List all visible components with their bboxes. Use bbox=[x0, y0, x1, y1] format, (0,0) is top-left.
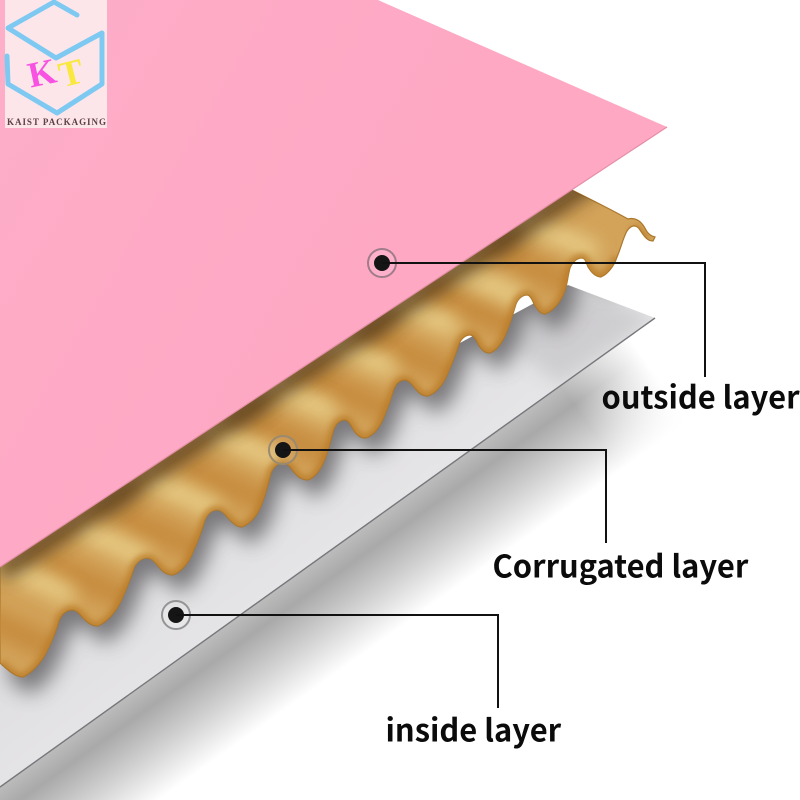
callout: outside layer bbox=[368, 249, 800, 418]
panel: inside layer sheet bbox=[0, 285, 656, 788]
leader line: outside layer bbox=[382, 263, 705, 377]
label: outside layer: outside layer bbox=[602, 372, 800, 418]
marker: inside layer bbox=[162, 601, 190, 629]
label: corrugated layer: Corrugated layer bbox=[492, 542, 749, 586]
panel: outside layer pink sheet bbox=[0, 0, 667, 567]
panel: corrugated layer bbox=[0, 190, 656, 678]
shadow cast below the inside layer bbox=[0, 318, 800, 800]
callout: inside layer bbox=[162, 601, 562, 750]
icon: logo cube bbox=[7, 2, 102, 113]
marker: outside layer bbox=[368, 249, 396, 277]
logo letter K: K bbox=[24, 51, 60, 95]
leader line: corrugated layer bbox=[283, 450, 606, 543]
callout: corrugated layer bbox=[269, 436, 749, 586]
marker: corrugated layer bbox=[269, 436, 297, 464]
logo: Kaist Packaging bbox=[5, 0, 107, 128]
label: inside layer: inside layer bbox=[386, 706, 562, 750]
leader line: inside layer bbox=[176, 615, 498, 708]
logo letter T: T bbox=[55, 51, 87, 95]
logo wordmark: KAIST PACKAGING bbox=[7, 117, 106, 127]
